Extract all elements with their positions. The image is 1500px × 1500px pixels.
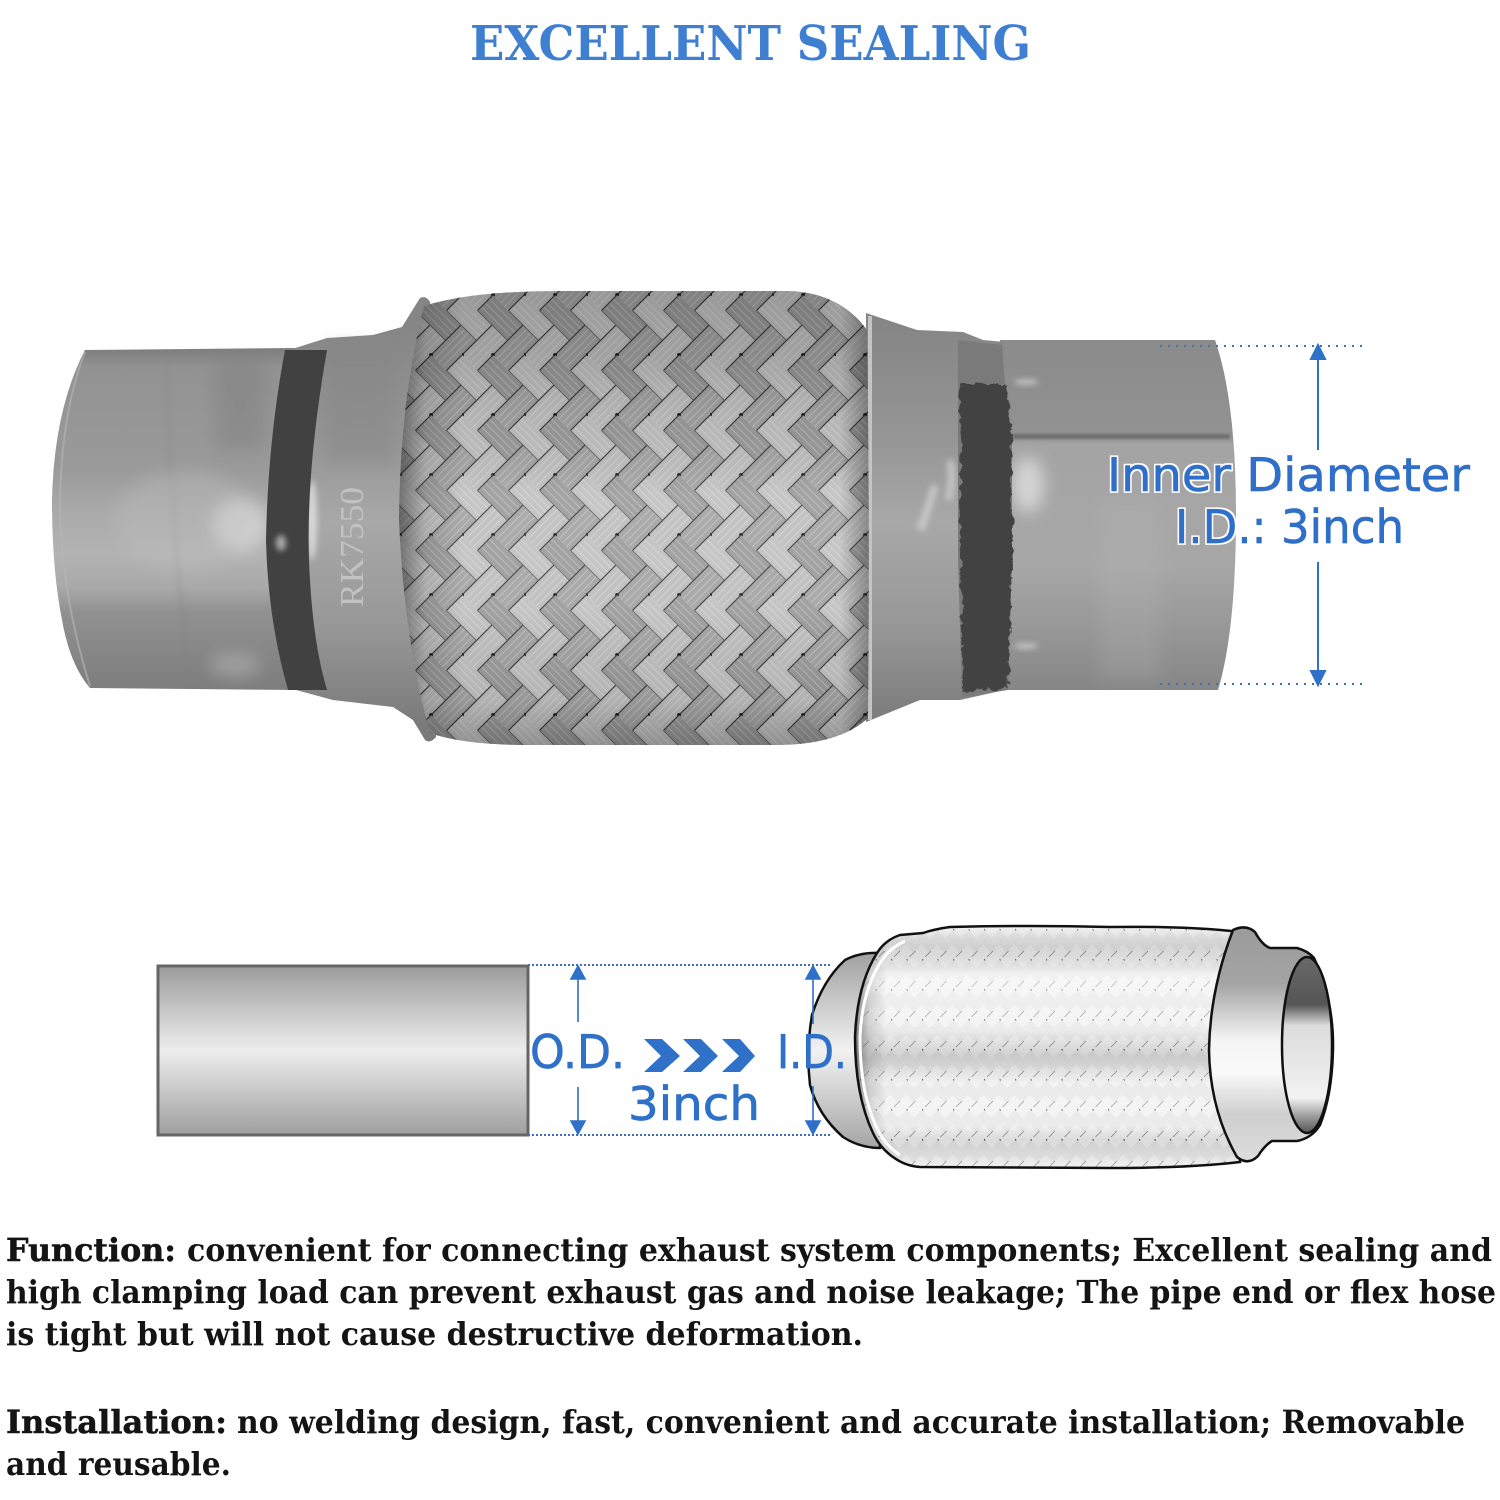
function label: Function: — [6, 1231, 176, 1269]
arrow: I.D. bottom — [806, 1086, 820, 1134]
label: inner diameter: Inner Diameter — [1107, 448, 1470, 502]
left tube end — [52, 348, 297, 690]
flex pipe photograph — [52, 291, 1236, 745]
description: installation — [6, 1403, 1465, 1483]
label: inner diameter value: I.D.: 3inch — [1175, 500, 1404, 554]
arrow: O.D. top — [571, 966, 585, 1022]
arrow: top — [1311, 345, 1325, 450]
right tube end — [1000, 340, 1236, 690]
arrow: bottom — [1311, 562, 1325, 685]
right lip — [1209, 927, 1333, 1161]
left weld band — [266, 350, 327, 690]
part number stamp: RK7550 — [334, 487, 371, 607]
title: EXCELLENT SEALING — [470, 16, 1031, 72]
label: 3inch: 3inch — [628, 1077, 760, 1131]
function line three: is tight but will not cause destructive deformation. — [6, 1315, 863, 1353]
left weld spot — [276, 535, 286, 551]
label: O.D.: O.D. — [530, 1025, 625, 1079]
braid sleeve — [855, 926, 1240, 1168]
left lip — [808, 953, 880, 1148]
right collar — [866, 313, 1005, 722]
left collar — [292, 297, 438, 741]
straight steel pipe — [158, 966, 528, 1135]
installation line two: and reusable. — [6, 1445, 231, 1483]
woven braid sleeve — [399, 291, 869, 745]
arrow: O.D. bottom — [571, 1087, 585, 1134]
label: I.D.: I.D. — [777, 1025, 847, 1079]
right weld band — [958, 340, 1012, 697]
flex pipe illustration — [808, 926, 1333, 1168]
description: function — [6, 1231, 1496, 1353]
icon: triple chevron arrows — [644, 1039, 755, 1072]
installation label: Installation: — [6, 1403, 227, 1441]
bore opening — [1282, 957, 1332, 1133]
outer and inner diameter comparison — [528, 965, 847, 1135]
inner diameter dimension — [1107, 345, 1470, 685]
arrow: I.D. top — [806, 966, 820, 1024]
